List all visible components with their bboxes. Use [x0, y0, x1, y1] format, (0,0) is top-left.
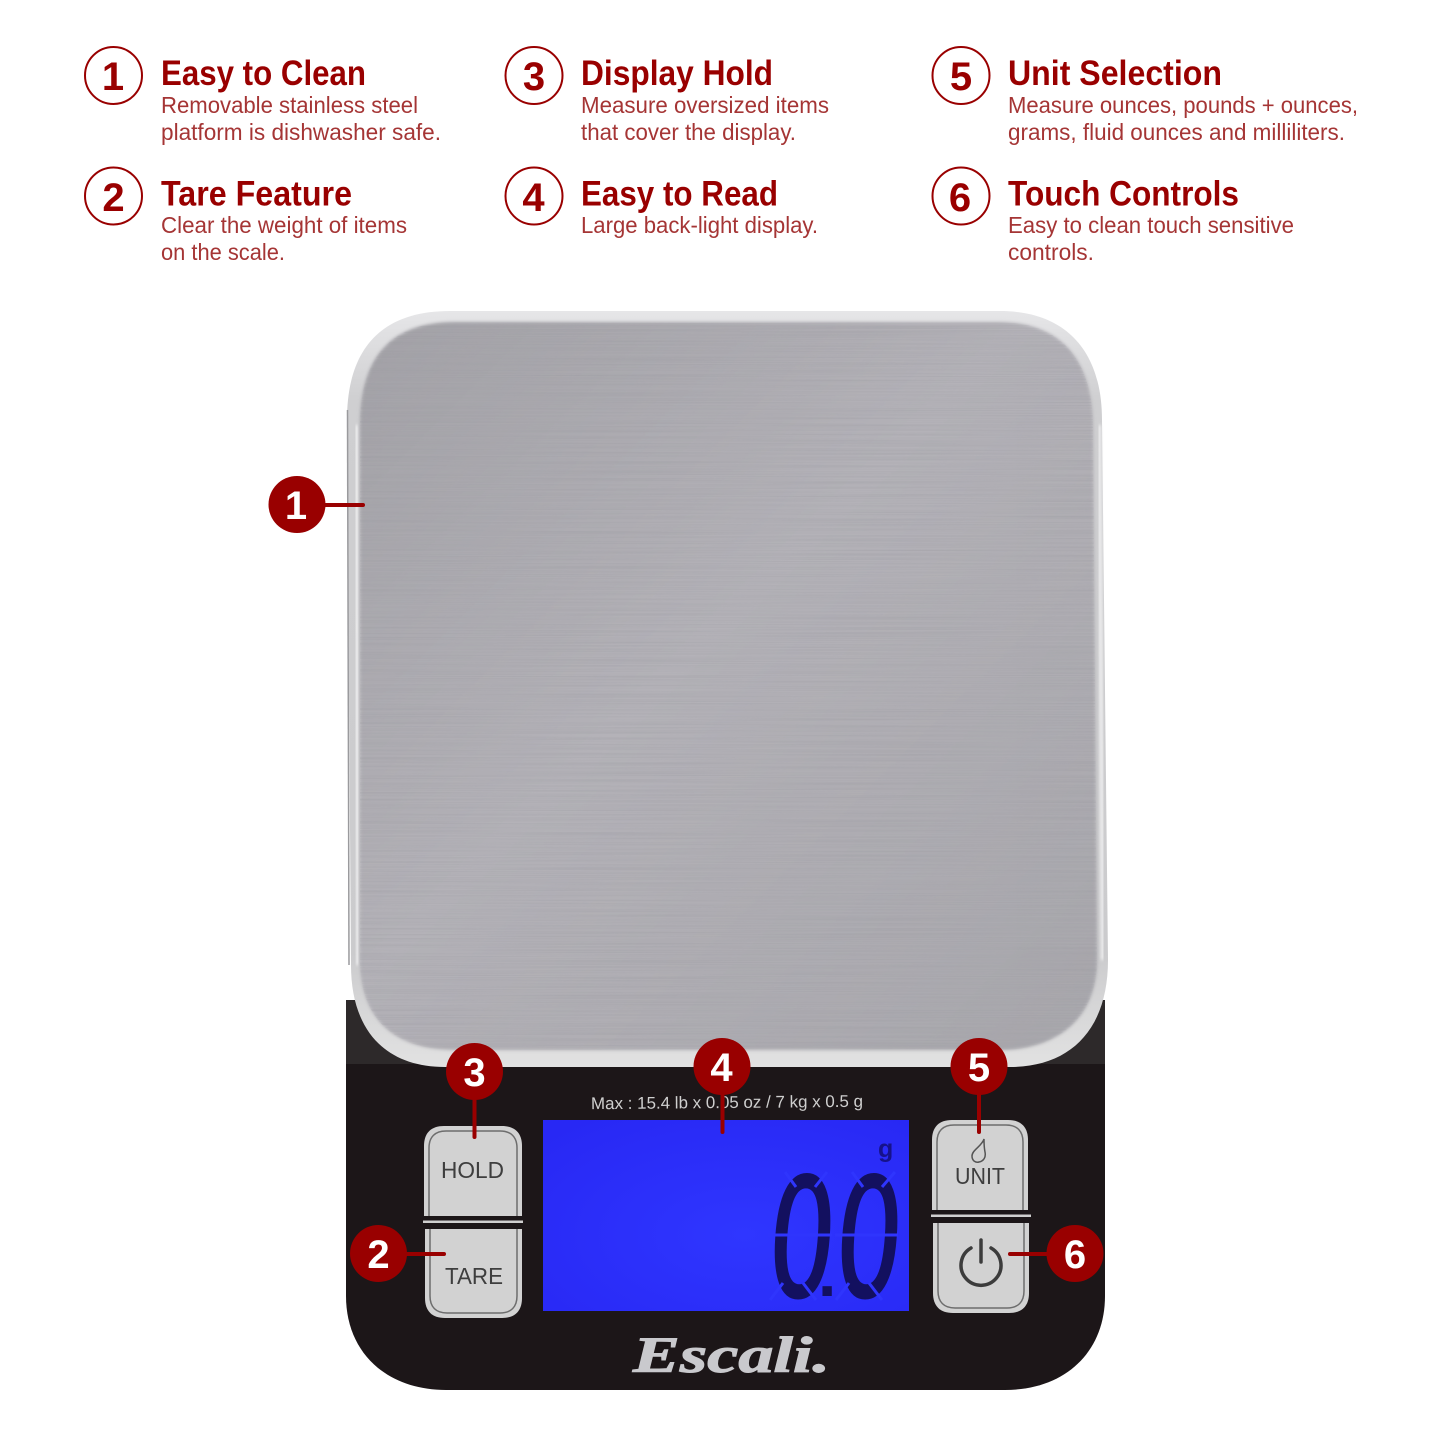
feature 2: tare feature: Clear the weight of items [161, 212, 407, 238]
tare button: TARE [445, 1263, 503, 1289]
callout 6: power [1010, 1225, 1104, 1282]
callout 1: platform [268, 476, 363, 533]
reading 0.0: 0 [829, 1144, 909, 1335]
kitchen scale [346, 311, 1110, 1390]
callout 5: unit [950, 1038, 1008, 1132]
scale base [346, 1064, 1105, 1390]
feature 4: easy to read: Easy to Read [581, 174, 778, 214]
left buttons [423, 1126, 523, 1318]
callout 5: unit: 5 [968, 1046, 990, 1090]
feature 3: display hold: Display Hold [581, 54, 773, 93]
feature 4: easy to read: 4 [522, 176, 545, 220]
feature 5: unit selection: grams, fluid ounces and milliliters. [1008, 119, 1345, 145]
right buttons [931, 1120, 1031, 1313]
feature 6: touch controls: controls. [1008, 239, 1094, 265]
callout 4: display: 4 [710, 1046, 733, 1090]
hold button [424, 1126, 522, 1216]
callout 6: power: 6 [1064, 1233, 1086, 1277]
feature 3: display hold: 3 [523, 55, 545, 99]
icon: water drop [972, 1139, 985, 1162]
lcd segment gaps [768, 1172, 898, 1300]
feature 3: display hold: that cover the display. [581, 119, 796, 145]
reading 0.0: 0 [762, 1144, 842, 1335]
feature 6: touch controls: Easy to clean touch sensitive [1008, 212, 1294, 238]
reading 0.0: . [818, 1236, 836, 1310]
feature list [85, 47, 1358, 265]
feature 4: easy to read [506, 168, 818, 238]
feature 2: tare feature: Tare Feature [161, 174, 352, 214]
hold button: HOLD [441, 1157, 504, 1183]
callout 1: platform: 1 [285, 484, 307, 528]
callout 3: hold: 3 [463, 1051, 486, 1095]
lcd display [543, 1120, 909, 1335]
callout 4: display [694, 1038, 750, 1132]
stainless steel platform [347, 311, 1110, 1067]
feature 1: easy to clean: 1 [102, 55, 124, 99]
feature 3: display hold: Measure oversized items [581, 92, 829, 118]
tare button [425, 1229, 522, 1318]
feature 5: unit selection: 5 [950, 55, 972, 99]
feature 5: unit selection: Unit Selection [1008, 54, 1222, 93]
feature 6: touch controls: Touch Controls [1008, 174, 1239, 214]
feature 6: touch controls: 6 [949, 176, 971, 220]
feature 3: display hold [506, 47, 829, 145]
power button [933, 1223, 1029, 1313]
icon: power [961, 1240, 1001, 1285]
feature 2: tare feature: 2 [102, 176, 125, 220]
callout 3: hold [446, 1043, 503, 1137]
feature 1: easy to clean: Removable stainless steel [161, 92, 418, 118]
reading 0.0 [762, 1144, 909, 1335]
feature 1: easy to clean [85, 47, 441, 145]
unit g: g [878, 1135, 893, 1163]
callout 2: tare: 2 [367, 1233, 390, 1277]
feature 1: easy to clean: Easy to Clean [161, 54, 366, 93]
feature 5: unit selection [932, 47, 1358, 145]
feature 6: touch controls [932, 168, 1294, 265]
feature 2: tare feature [85, 168, 407, 265]
unit button [932, 1120, 1028, 1210]
feature 2: tare feature: on the scale. [161, 239, 285, 265]
unit button: UNIT [955, 1163, 1005, 1189]
feature 4: easy to read: Large back-light display. [581, 212, 818, 238]
feature 1: easy to clean: platform is dishwasher safe. [161, 119, 441, 145]
feature 5: unit selection: Measure ounces, pounds + ounces, [1008, 92, 1358, 118]
capacity label: Max : 15.4 lb x 0.05 oz / 7 kg x 0.5 g [591, 1092, 863, 1113]
escali logo: Escali. [632, 1328, 830, 1384]
scale base upper shadow section [346, 1000, 1105, 1065]
callout 2: tare [350, 1225, 444, 1282]
